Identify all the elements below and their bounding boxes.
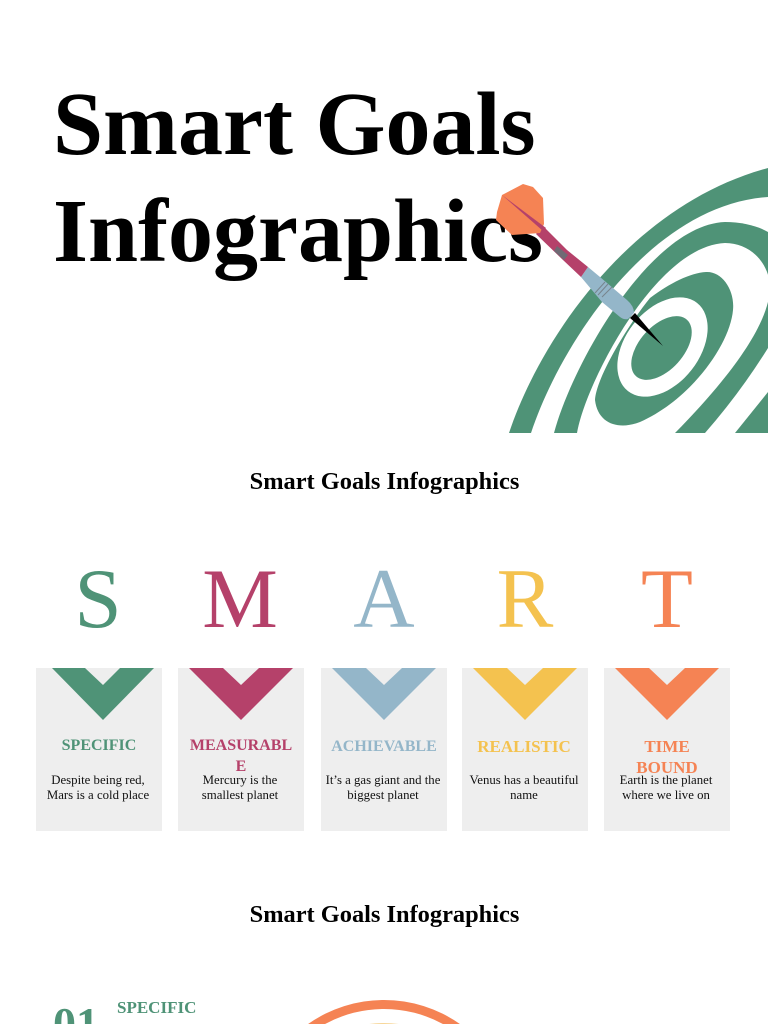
panel: achievable: ACHIEVABLE [331,738,437,755]
panel: measurable: Mercury is the [203,772,277,786]
panel: time bound: where we live on [622,788,710,802]
panel: specific: Despite being red, [51,772,145,786]
panel: realistic [462,668,588,831]
panel: time bound [604,668,730,831]
title: Smart Goals [53,75,535,174]
panel: realistic: Venus has a beautiful [469,772,579,786]
title [53,75,543,281]
panel: specific [36,668,162,831]
panel: specific: Mars is a cold place [47,788,149,802]
title: Infographics [53,182,543,281]
panel: realistic: name [510,788,538,802]
letter M: M [202,552,278,646]
letter R: R [497,552,553,646]
panel: time bound: Earth is the planet [620,772,712,786]
heading: Smart Goals Infographics [250,468,519,495]
panel: achievable: It’s a gas giant and the [326,772,440,786]
panel: time bound: BOUND [636,758,698,777]
letter A: A [353,552,415,646]
panel: measurable: smallest planet [202,788,278,802]
panel: specific: SPECIFIC [62,737,136,754]
panel: measurable: MEASURABL [190,737,292,754]
heading: Smart Goals Infographics [250,901,519,928]
letter S: S [74,552,122,646]
letter T: T [641,552,693,646]
label: specific: SPECIFIC [117,998,196,1017]
panel: realistic: REALISTIC [477,737,571,756]
icon: target with dart [496,168,768,433]
panel: time bound: TIME [644,737,690,756]
target rings [509,168,768,433]
circle diagram [308,1000,460,1024]
dart [496,184,663,346]
panel: measurable: E [236,758,246,775]
panel: achievable: biggest planet [347,788,419,802]
panel: achievable [321,668,447,831]
panel: measurable [178,668,304,831]
